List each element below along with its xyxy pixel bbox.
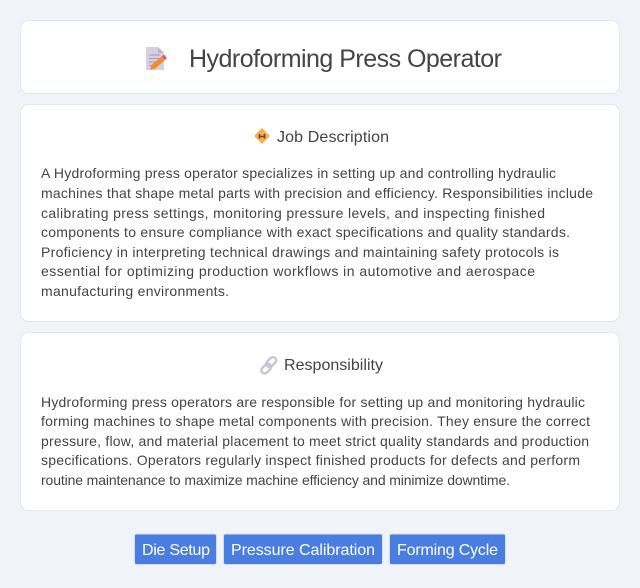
text: job description body: machines that shape metal parts with precision and efficiency. Responsibilities include [41, 185, 593, 201]
text: job description body: essential for optimizing production workflows in automotive and aerospace [41, 263, 535, 279]
heading: responsibility: Responsibility [284, 357, 383, 374]
heading: job description: Job Description [277, 129, 389, 146]
text: job description body: manufacturing environments. [41, 283, 229, 299]
tag: die setup: Die Setup [142, 542, 210, 559]
tag: pressure calibration: Pressure Calibration [231, 542, 375, 559]
text: job description body: Proficiency in interpreting technical drawings and maintaining safety protocols is [41, 244, 559, 260]
panel: responsibility [20, 332, 620, 510]
tag: forming cycle: Forming Cycle [397, 542, 498, 559]
tag: die setup [134, 534, 216, 564]
tag: forming cycle [390, 534, 506, 564]
text: job description body: calibrating press settings, monitoring pressure levels, and inspecting finished [41, 205, 545, 221]
text: responsibility body [41, 394, 590, 488]
icon: chain link [260, 356, 277, 375]
text: responsibility body: specifications. Operators regularly inspect finished products for defects and perform [41, 452, 580, 468]
text: responsibility body: routine maintenance to maximize machine efficiency and minimize downtime. [41, 472, 510, 488]
text: responsibility body: forming machines to shape metal components with precision. They ensure the correct [41, 413, 590, 429]
text: job description body [41, 165, 593, 299]
text: responsibility body: pressure, flow, and material placement to meet strict quality standards and production [41, 433, 589, 449]
text: job description body: components to ensure compliance with exact specifications and quality standards. [41, 224, 570, 240]
tag: pressure calibration [224, 534, 382, 564]
panel: title card [20, 20, 620, 94]
title: Hydroforming Press Operator [189, 45, 502, 73]
panel: job description [20, 104, 620, 322]
icon: document with pencil [146, 47, 167, 70]
text: job description body: A Hydroforming press operator specializes in setting up and controlling hydraulic [41, 165, 556, 181]
text: responsibility body: Hydroforming press operators are responsible for setting up and monitoring hydraulic [41, 394, 585, 410]
icon: diamond sign [254, 128, 270, 144]
